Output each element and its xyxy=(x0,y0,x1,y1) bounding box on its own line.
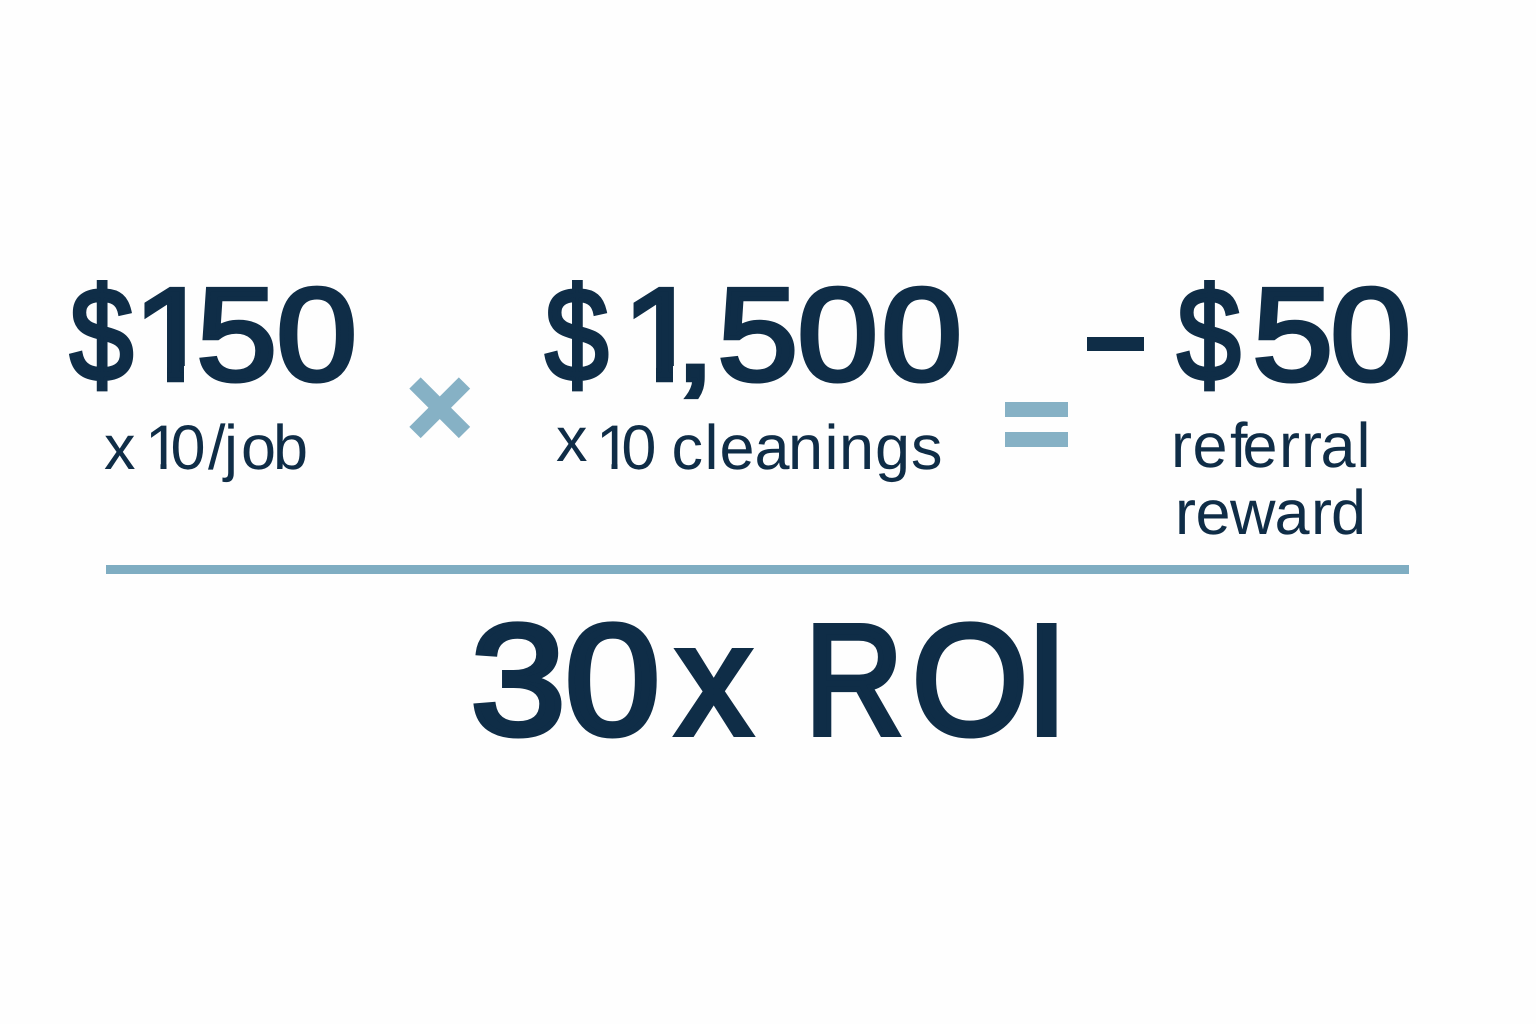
value: $1,500 xyxy=(545,261,962,408)
value: $1,500: ,500 xyxy=(675,261,962,408)
divider line xyxy=(106,565,1409,574)
value: $1,500: 1 xyxy=(622,261,703,408)
label: x 10/job: x 1 xyxy=(104,413,180,483)
value: $1,500: $ xyxy=(545,261,608,408)
value: $50: $ xyxy=(1177,261,1240,408)
result: 30x ROI: x xyxy=(676,593,752,768)
result: 30x ROI: R xyxy=(805,593,903,768)
value: $150: $ xyxy=(70,261,133,408)
label: x 10/job: 0/job xyxy=(170,413,308,483)
label: x 10 cleanings: x 1 xyxy=(556,405,631,483)
icon: equals sign xyxy=(1005,402,1068,447)
label: x 10 cleanings: 0 cleanings xyxy=(621,413,942,483)
label: referral reward: reward xyxy=(1175,478,1366,548)
result: 30x ROI xyxy=(471,593,1067,768)
label: referral reward xyxy=(1171,411,1370,548)
value: $150: 50 xyxy=(196,261,357,408)
value: $50 xyxy=(1177,261,1411,408)
icon: minus sign xyxy=(1087,337,1144,351)
value: $50: 50 xyxy=(1252,261,1411,408)
label: x 10/job xyxy=(104,413,308,483)
value: $150 xyxy=(70,261,357,408)
icon: multiply sign xyxy=(415,383,464,432)
value: $150: 1 xyxy=(133,261,214,408)
result: 30x ROI: 30 xyxy=(471,593,660,768)
result: 30x ROI: OI xyxy=(912,593,1067,768)
label: referral reward: referral xyxy=(1171,411,1370,481)
